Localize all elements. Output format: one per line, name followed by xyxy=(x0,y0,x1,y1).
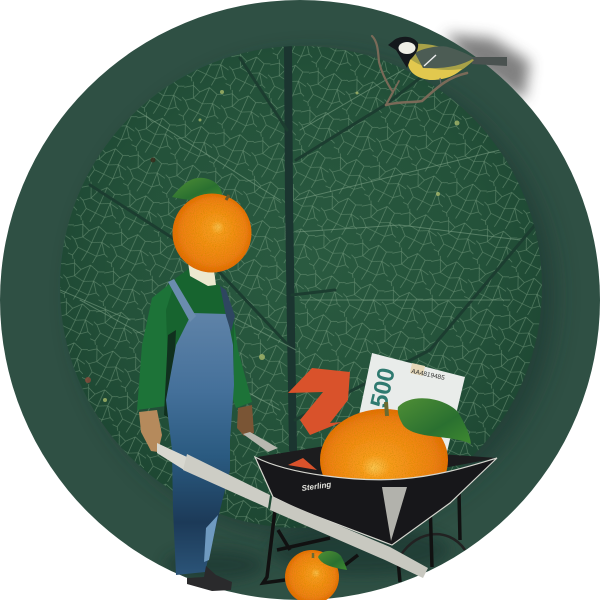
arm shadow xyxy=(164,330,176,420)
stem xyxy=(312,553,314,558)
fruit xyxy=(172,194,252,272)
shoe xyxy=(187,566,232,591)
sweater torso xyxy=(166,268,234,375)
body xyxy=(408,44,474,80)
bird on branch xyxy=(372,36,507,105)
strap left xyxy=(168,279,196,322)
small orange xyxy=(285,550,347,600)
leaf base xyxy=(55,40,550,535)
head xyxy=(388,37,418,68)
right hand xyxy=(237,405,254,436)
bird shadow xyxy=(445,34,530,100)
banknote xyxy=(358,353,465,452)
note value: 500 xyxy=(366,365,401,410)
right arm xyxy=(218,286,252,408)
left arm xyxy=(137,282,180,410)
figure: gardener xyxy=(137,262,254,591)
leaf xyxy=(172,178,222,200)
note paper xyxy=(358,353,465,452)
wheelbarrow back handle xyxy=(243,432,278,452)
orange zigzag shape xyxy=(288,368,350,435)
wheelbarrow tub xyxy=(255,457,497,545)
handle lower beam xyxy=(270,497,428,578)
belly xyxy=(408,57,462,80)
tail xyxy=(472,57,507,66)
note serial: AA4819485 xyxy=(411,368,446,382)
leaf spots xyxy=(85,90,460,402)
leaf shadow xyxy=(218,89,555,533)
fruit xyxy=(320,409,448,511)
tub corner plate xyxy=(382,487,407,541)
wing xyxy=(415,46,474,68)
leaf xyxy=(318,551,347,570)
handle upper beam xyxy=(183,454,270,508)
wheel xyxy=(397,534,465,562)
wheelbarrow interior xyxy=(257,446,497,480)
head orange xyxy=(172,178,252,272)
orange scrap in tub xyxy=(288,458,317,470)
fruit xyxy=(285,550,339,600)
branch xyxy=(372,36,467,105)
wheelbarrow handle xyxy=(157,443,428,578)
handle grip xyxy=(157,443,187,470)
strap right xyxy=(220,286,235,332)
leaf circle xyxy=(55,40,550,535)
wheelbarrow frame and wheel xyxy=(263,493,465,583)
ground shadows xyxy=(165,525,450,581)
trouser cuff xyxy=(204,515,218,562)
cheek xyxy=(398,42,416,54)
big orange xyxy=(320,398,471,511)
wing bar xyxy=(424,55,436,66)
brand: Sterling xyxy=(301,480,332,493)
stem xyxy=(226,195,229,200)
vein network xyxy=(55,40,550,535)
tub body xyxy=(255,457,497,545)
collar xyxy=(188,262,216,286)
stem xyxy=(386,402,387,416)
note tint xyxy=(410,363,425,376)
leg xyxy=(440,78,441,84)
overalls xyxy=(166,313,234,575)
main veins xyxy=(60,45,535,450)
left hand xyxy=(139,410,162,452)
leaf xyxy=(398,398,471,444)
